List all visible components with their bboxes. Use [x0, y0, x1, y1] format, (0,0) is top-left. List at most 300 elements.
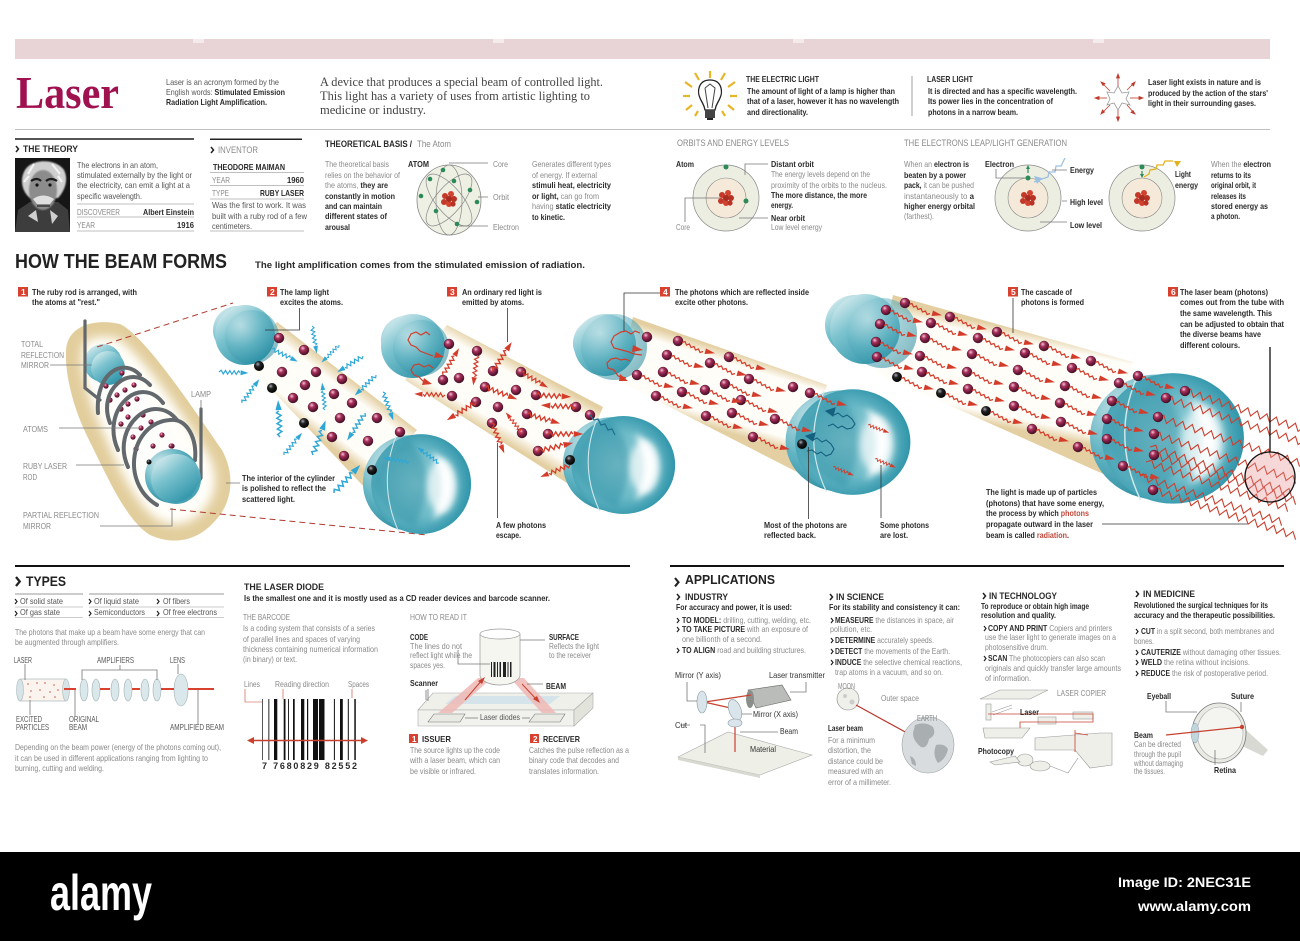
label: step 6: can be adjusted to obtain that: [1180, 319, 1284, 329]
labels: orbits: The energy levels depend on the: [771, 169, 870, 179]
diagram: barcode: [245, 689, 368, 771]
text: barcode: Is a coding system that consists of a series: [243, 623, 375, 633]
callout: cylinder interior: scattered light.: [242, 494, 295, 504]
diagram: how to read it: SURFACE: [549, 632, 579, 642]
step: issuer: 1: [412, 735, 417, 744]
diagram: how to read it: reflect light while the: [410, 650, 472, 660]
column: science: pollution, etc.: [830, 624, 872, 634]
panel: inventor: TYPE: [212, 188, 229, 198]
step: issuer: ISSUER: [422, 734, 451, 744]
text: barcode: THE BARCODE: [243, 612, 290, 622]
diagram: atom: [417, 163, 488, 235]
diagram: eye: without damaging: [1133, 758, 1183, 768]
atoms: [871, 298, 1190, 495]
step: receiver: [529, 734, 629, 776]
labels: electron levels: Electron: [985, 159, 1014, 169]
step: receiver: translates information.: [529, 766, 599, 776]
callout: light particles: (photons) that have some energy,: [986, 498, 1104, 508]
block: electric light: and directionality.: [747, 107, 808, 117]
block: electric light: THE ELECTRIC LIGHT: [746, 74, 820, 84]
panel: step 2 excitation: [213, 287, 471, 534]
acronym text: Laser is an acronym formed by the: [166, 77, 279, 87]
red photon arrows: [641, 342, 897, 477]
label: step 2: [265, 287, 343, 330]
block: laser in nature: [1148, 77, 1268, 108]
text: atom right column: having static electricity: [532, 201, 611, 211]
right lens: [563, 416, 675, 514]
text: power uses: burning, cutting and welding.: [15, 763, 104, 773]
photo: portrait: [15, 158, 70, 232]
labels: electron levels: High level: [1070, 197, 1103, 207]
label: step 4: The photons which are reflected inside: [675, 287, 809, 297]
labels: amplifier chain: [14, 655, 224, 732]
header band: [15, 39, 1270, 59]
column: technology: use the laser light to generate images on a: [985, 632, 1116, 642]
heading: the theory: THE THEORY: [23, 144, 79, 155]
footer bar: [0, 852, 1300, 941]
diagram: electron excited: [995, 158, 1067, 231]
block: laser light: It is directed and has a specific wavelength.: [928, 86, 1077, 96]
column: medicine: REDUCE the risk of postoperative period.: [1141, 668, 1268, 678]
label: step 5: The cascade of: [1021, 287, 1072, 297]
table: laser types: Of free electrons: [163, 607, 217, 617]
callout: cylinder interior: is polished to reflect the: [242, 483, 326, 493]
atoms: [254, 333, 405, 475]
panel: the theory: 1916: [177, 220, 194, 230]
label: step 6: [1168, 287, 1284, 350]
heading: electrons leap: THE ELECTRONS LEAP/LIGHT GENERATION: [904, 138, 1067, 148]
diagram: laser cutter: Beam: [780, 726, 798, 736]
block: electric light: that of a laser, however it has no wavelength: [747, 96, 899, 106]
diagram: how to read it: to the receiver: [549, 650, 591, 660]
block: electric light: The amount of light of a lamp is higher than: [747, 86, 895, 96]
text: barcode: [243, 612, 378, 664]
ruby rod: [84, 344, 192, 497]
heading: laser diode: [244, 582, 550, 603]
reflective cylinder: [66, 322, 230, 541]
labels: device parts: [21, 339, 240, 531]
intro text: medicine or industry.: [320, 102, 426, 117]
diagram: orbits: [685, 164, 768, 231]
column: technology: SCAN The photocopiers can also scan: [988, 653, 1105, 663]
label: step 1: the atoms at "rest.": [32, 297, 100, 307]
labels: amplifier chain: AMPLIFIED BEAM: [170, 722, 224, 732]
diagram: amplifier chain: [16, 664, 214, 725]
left mirror: [213, 305, 279, 365]
text: amplifiers: The photons that make up a beam have some energy that can: [15, 627, 205, 637]
label: step 4: [624, 287, 809, 331]
text: atom right column: of energy. If external: [532, 170, 597, 180]
text: barcode: (in binary) or text.: [243, 654, 297, 664]
tube: [248, 322, 417, 490]
diagram: how to read it: The lines do not: [410, 641, 463, 651]
callout: cylinder interior: [242, 473, 336, 504]
label: step 6: the diverse beams have: [1180, 329, 1261, 339]
heading: how the beam forms: The light amplification comes from the stimulated emission of radiation.: [255, 260, 585, 271]
panel: inventor: [210, 138, 308, 231]
labels: device parts: TOTAL: [21, 339, 43, 349]
text: leap right column: [1211, 159, 1271, 221]
diagram: eye: Retina: [1214, 765, 1236, 775]
diagram: how to read it: [410, 612, 600, 726]
diagram: electron releasing light: [1109, 161, 1181, 231]
diagram: laser cutter: Mirror (Y axis): [675, 670, 721, 680]
panel: the theory: DISCOVERER: [77, 207, 120, 217]
labels: barcode: Lines: [244, 679, 260, 689]
heading: how the beam forms: HOW THE BEAM FORMS: [15, 251, 227, 273]
labels: device parts: PARTIAL REFLECTION: [23, 510, 99, 520]
label: step 6: different colours.: [1180, 340, 1240, 350]
column: medicine: CUT in a split second, both membranes and: [1141, 626, 1274, 636]
diagram: how to read it: HOW TO READ IT: [410, 612, 467, 622]
diagram: how to read it: Laser diodes: [480, 712, 520, 722]
diagram: laser copier: Photocopy: [978, 746, 1014, 756]
panel: orbits and energy levels: [676, 138, 887, 232]
text: amplifiers: be augmented through amplifiers.: [15, 637, 119, 647]
labels: amplifier chain: AMPLIFIERS: [97, 655, 134, 665]
diagram: laser copier: Laser: [1020, 707, 1040, 717]
step: issuer: be visible or infrared.: [410, 766, 476, 776]
text: theory description: The electrons in an atom,: [77, 160, 158, 170]
diagram: eye: Suture: [1231, 691, 1254, 701]
panel: step 3 emission: [381, 287, 675, 540]
step: receiver: 2: [533, 735, 538, 744]
panel: the theory: YEAR: [77, 220, 95, 230]
diagram: moon and earth: distortion, the: [828, 745, 871, 755]
diagram: how to read it: Scanner: [410, 678, 439, 688]
diagram: moon and earth: For a minimum: [828, 735, 875, 745]
diagram: how to read it: spaces yes.: [410, 660, 445, 670]
text: leap left column: instantaneously to a: [904, 191, 974, 201]
labels: light energy: Light: [1175, 169, 1191, 179]
heading: inventor: INVENTOR: [218, 145, 258, 156]
left mirror: [573, 314, 647, 381]
block: laser in nature: produced by the action of the stars': [1148, 88, 1268, 98]
labels: electron levels: Low level: [1070, 220, 1102, 230]
table: laser types: Of liquid state: [94, 596, 139, 606]
label: step 5: [1008, 287, 1084, 333]
intro text: A device that produces a special beam of controlled light.: [320, 74, 603, 89]
label: step 6: The laser beam (photons): [1180, 287, 1268, 297]
callout: light particles: The light is made up of particles: [986, 487, 1097, 497]
callout: light particles: [986, 487, 1247, 540]
heading: laser diode: Is the smallest one and it is mostly used as a CD reader devices and barcode scanner.: [244, 593, 550, 603]
right lens: [363, 434, 471, 534]
callout: light particles: beam is called radiation.: [986, 530, 1069, 540]
label: step 5: 5: [1011, 287, 1016, 297]
heading: orbits: ORBITS AND ENERGY LEVELS: [677, 138, 789, 148]
labels: electron levels: Energy: [1070, 165, 1094, 175]
column: technology: of information.: [985, 673, 1031, 683]
labels: atom parts: [408, 159, 519, 232]
diagram: how to read it: Reflects the light: [549, 641, 600, 651]
table: laser types: Of fibers: [163, 596, 190, 606]
block: laser in nature: light in their surrounding gases.: [1148, 98, 1256, 108]
highlight circle: [1245, 347, 1295, 502]
acronym text: English words: Stimulated Emission: [166, 87, 285, 97]
column: technology: originals and quickly transfer large amounts: [985, 663, 1121, 673]
icon: light bulb: [683, 71, 737, 120]
text: atom left column: different states of: [325, 211, 387, 221]
diagram: how to read it: BEAM: [546, 681, 566, 691]
text: atom left column: arousal: [325, 222, 350, 232]
label: step 1: The ruby rod is arranged, with: [32, 287, 137, 297]
text: atom left column: [325, 159, 401, 232]
column: science: INDUCE the selective chemical reactions,: [835, 657, 962, 667]
labels: orbits: The more distance, the more: [771, 190, 867, 200]
labels: device parts: LAMP: [191, 389, 211, 399]
callout: photons escape: [496, 443, 546, 540]
labels: atom parts: Core: [493, 159, 508, 169]
table: laser types: Of gas state: [20, 607, 60, 617]
column: medicine: bones.: [1134, 636, 1154, 646]
intro text: [320, 74, 603, 117]
panel: inventor: centimeters.: [212, 221, 252, 231]
table: laser types: Of solid state: [20, 596, 63, 606]
column: science: IN SCIENCE: [836, 592, 884, 603]
diagram: moon and earth: distance could be: [828, 756, 883, 766]
diagram: eye: Eyeball: [1147, 691, 1171, 701]
block: laser light: [927, 74, 1077, 117]
acronym text: Radiation Light Amplification.: [166, 97, 267, 107]
text: power uses: Depending on the beam power (energy of the photons coming out),: [15, 742, 221, 752]
labels: device parts: MIRROR: [23, 521, 51, 531]
block: laser light: photons in a narrow beam.: [928, 107, 1018, 117]
label: step 6: 6: [1171, 287, 1176, 297]
callout: photons lost: [880, 465, 929, 540]
partial mirror lens: [145, 444, 201, 504]
dashed zoom lines: [97, 303, 427, 535]
column: medicine: WELD the retina without incisions.: [1141, 657, 1250, 667]
panel: inventor: Was the first to work. It was: [212, 200, 306, 210]
label: step 3: An ordinary red light is: [462, 287, 542, 297]
footer logo: alamy: [50, 865, 152, 921]
block: laser light: LASER LIGHT: [927, 74, 974, 84]
text: atom right column: to kinetic.: [532, 212, 565, 222]
labels: device parts: ROD: [23, 472, 37, 482]
diagram: moon and earth: measured with an: [828, 766, 883, 776]
callout: photons lost: Some photons: [880, 520, 929, 530]
labels: orbits: Low level energy: [771, 222, 823, 232]
label: step 4: 4: [663, 287, 668, 297]
column: science: trap atoms in a vacuum, and so on.: [835, 667, 943, 677]
label: step 4: excite other photons.: [675, 297, 748, 307]
block: laser light: Its power lies in the concentration of: [928, 96, 1053, 106]
labels: barcode: Reading direction: [275, 679, 329, 689]
labels: amplifier chain: LENS: [170, 655, 185, 665]
labels: atom parts: Orbit: [493, 192, 510, 202]
laser beam waves: [1139, 388, 1300, 540]
column: industry: TO ALIGN road and building structures.: [682, 645, 806, 655]
intro text: This light has a variety of uses from artistic lighting to: [320, 88, 590, 103]
column: industry: [676, 592, 811, 655]
red photon arrows: [414, 341, 615, 480]
step: issuer: [409, 734, 500, 776]
text: leap right column: returns to its: [1211, 170, 1251, 180]
diagram: how to read it: CODE: [410, 632, 428, 642]
step: receiver: binary code that decodes and: [529, 755, 619, 765]
labels: orbits: energy.: [771, 200, 793, 210]
column: science: [829, 592, 962, 677]
column: technology: COPY AND PRINT Copiers and printers: [988, 623, 1112, 633]
red photon arrows: [880, 304, 1175, 479]
column: science: DETERMINE accurately speeds.: [835, 635, 934, 645]
text: atom left column: relies on the behavior of: [325, 170, 401, 180]
column: technology: photosensitive drum.: [985, 642, 1048, 652]
step: issuer: with a laser beam, which can: [409, 755, 500, 765]
labels: electron levels: [985, 159, 1103, 230]
column: technology: To reproduce or obtain high image: [981, 601, 1089, 611]
text: leap right column: releases its: [1211, 191, 1246, 201]
column: industry: INDUSTRY: [685, 592, 729, 603]
labels: device parts: MIRROR: [21, 360, 49, 370]
column: medicine: IN MEDICINE: [1143, 589, 1195, 600]
labels: barcode: [244, 679, 369, 689]
text: leap right column: original orbit, it: [1211, 180, 1256, 190]
label: step 1: [18, 287, 137, 307]
text: atom left column: constantly in motion: [325, 191, 395, 201]
panel: inventor: built with a ruby rod of a few: [212, 211, 308, 221]
blue energy arrows: [219, 326, 440, 495]
diagram: laser cutter: Material: [750, 744, 776, 754]
heading: theoretical basis: The Atom: [417, 139, 451, 149]
callout: photons escape: escape.: [496, 530, 521, 540]
icon: star: [1095, 74, 1143, 121]
panel: step 1 laser device: [18, 287, 427, 541]
labels: orbits: Distant orbit: [771, 159, 814, 169]
labels: light energy: [1175, 169, 1198, 190]
right lens: [1090, 373, 1244, 504]
heading: how the beam forms: [15, 251, 585, 273]
diagram: moon and earth: MOON: [838, 681, 855, 691]
callout: cylinder interior: The interior of the cylinder: [242, 473, 336, 483]
step: receiver: RECEIVER: [543, 734, 580, 744]
text: barcode: of parallel lines and spaces of varying: [243, 634, 360, 644]
panel: applications: [670, 565, 1284, 787]
label: step 2: excites the atoms.: [280, 297, 343, 307]
panel: step 5 cascade: [825, 287, 1300, 540]
labels: amplifier chain: BEAM: [69, 722, 87, 732]
text: power uses: it can be used in different applications ranging from lighting to: [15, 753, 208, 763]
text: leap right column: When the electron: [1211, 159, 1271, 169]
text: theory description: [77, 160, 192, 201]
heading: laser diode: THE LASER DIODE: [244, 582, 324, 593]
right lens: [786, 389, 910, 495]
column: industry: one billionth of a second.: [682, 634, 762, 644]
diagram: barcode: 7 7680829 82552: [262, 761, 357, 771]
label: step 2: 2: [270, 287, 275, 297]
atoms in rod: [103, 370, 175, 452]
lamp coil: [85, 321, 201, 505]
tube: [617, 317, 827, 472]
step: receiver: Catches the pulse reflection as a: [529, 745, 629, 755]
diagram: moon and earth: Laser beam: [828, 723, 863, 733]
text: barcode: thickness containing numerical information: [243, 644, 378, 654]
heading: theoretical basis: THEORETICAL BASIS /: [325, 139, 412, 149]
panel: electrons leap: [904, 138, 1271, 231]
diagram: moon and earth: EARTH: [917, 713, 937, 723]
column: industry: For accuracy and power, it is used:: [676, 602, 792, 612]
left mirror: [825, 294, 917, 368]
labels: device parts: RUBY LASER: [23, 461, 67, 471]
column: technology: [981, 591, 1121, 683]
labels: amplifier chain: EXCITED: [16, 714, 42, 724]
panel: step 4 reflection: [573, 287, 929, 540]
text: leap left column: (farthest).: [904, 211, 934, 221]
step: issuer: The source lights up the code: [410, 745, 500, 755]
label: step 2: The lamp light: [280, 287, 329, 297]
label: step 3: emitted by atoms.: [462, 297, 524, 307]
column: science: For its stability and consistency it can:: [829, 602, 960, 612]
diagram: laser copier: LASER COPIER: [1057, 688, 1106, 698]
left mirror: [381, 314, 449, 385]
text: atom right column: Generates different types: [532, 159, 611, 169]
label: step 3: [447, 287, 542, 342]
diagram: laser cutter: Laser transmitter: [769, 670, 825, 680]
diagram: eye: Can be directed: [1134, 739, 1181, 749]
diagram: laser cutter: [675, 670, 825, 778]
diagram: moon and earth: error of a millimeter.: [828, 777, 891, 787]
callout: light particles: the process by which photons: [986, 508, 1089, 518]
text: atom left column: and can maintain: [325, 201, 382, 211]
acronym text: [166, 77, 285, 107]
labels: amplifier chain: PARTICLES: [16, 722, 49, 732]
diagram: laser cutter: Cut: [675, 720, 688, 730]
label: step 1: 1: [21, 287, 26, 297]
column: science: MEASEURE the distances in space, air: [835, 615, 954, 625]
column: industry: TO TAKE PICTURE with an exposure of: [682, 624, 809, 634]
table: laser types: [15, 594, 224, 618]
panel: the theory: Albert Einstein: [143, 207, 194, 217]
labels: orbits: [676, 159, 887, 232]
labels: device parts: REFLECTION: [21, 350, 64, 360]
table: laser types: Semiconductors: [94, 607, 145, 617]
column: industry: TO MODEL: drilling, cutting, welding, etc.: [682, 615, 811, 625]
labels: orbits: Core: [676, 222, 690, 232]
labels: amplifier chain: ORIGINAL: [69, 714, 99, 724]
diagram: eye: the tissues.: [1134, 766, 1165, 776]
diagram: laser copier: [978, 688, 1112, 773]
atoms: [438, 339, 595, 465]
text: theory description: specific wavelength.: [77, 191, 142, 201]
labels: device parts: ATOMS: [23, 424, 48, 434]
label: step 6: comes out from the tube with: [1180, 297, 1284, 307]
labels: barcode: Spaces: [348, 679, 369, 689]
blue reflected photons: [806, 408, 855, 456]
label: step 5: photons is formed: [1021, 297, 1084, 307]
block: laser in nature: Laser light exists in nature and is: [1148, 77, 1261, 87]
callout: reflected back: Most of the photons are: [764, 520, 847, 530]
label: step 3: 3: [450, 287, 455, 297]
text: amplifiers: [15, 627, 205, 647]
column: medicine: [1134, 589, 1281, 678]
callout: photons escape: A few photons: [496, 520, 546, 530]
labels: amplifier chain: LASER: [14, 655, 32, 665]
panel: inventor: YEAR: [212, 175, 230, 185]
atoms: [632, 332, 815, 449]
text: leap left column: When an electron is: [904, 159, 969, 169]
text: theory description: the electricity, can emit a light at a: [77, 180, 190, 190]
panel: inventor: 1960: [287, 175, 304, 185]
column: medicine: CAUTERIZE without damaging other tissues.: [1141, 647, 1281, 657]
text: leap left column: higher energy orbital: [904, 201, 975, 211]
footer url: www.alamy.com: [1137, 898, 1251, 914]
text: theory description: stimulated externally by the light or: [77, 170, 192, 180]
tube: [877, 295, 1133, 477]
callout: photons lost: are lost.: [880, 530, 908, 540]
callout: reflected back: [764, 447, 847, 540]
title: Laser: [16, 68, 119, 118]
